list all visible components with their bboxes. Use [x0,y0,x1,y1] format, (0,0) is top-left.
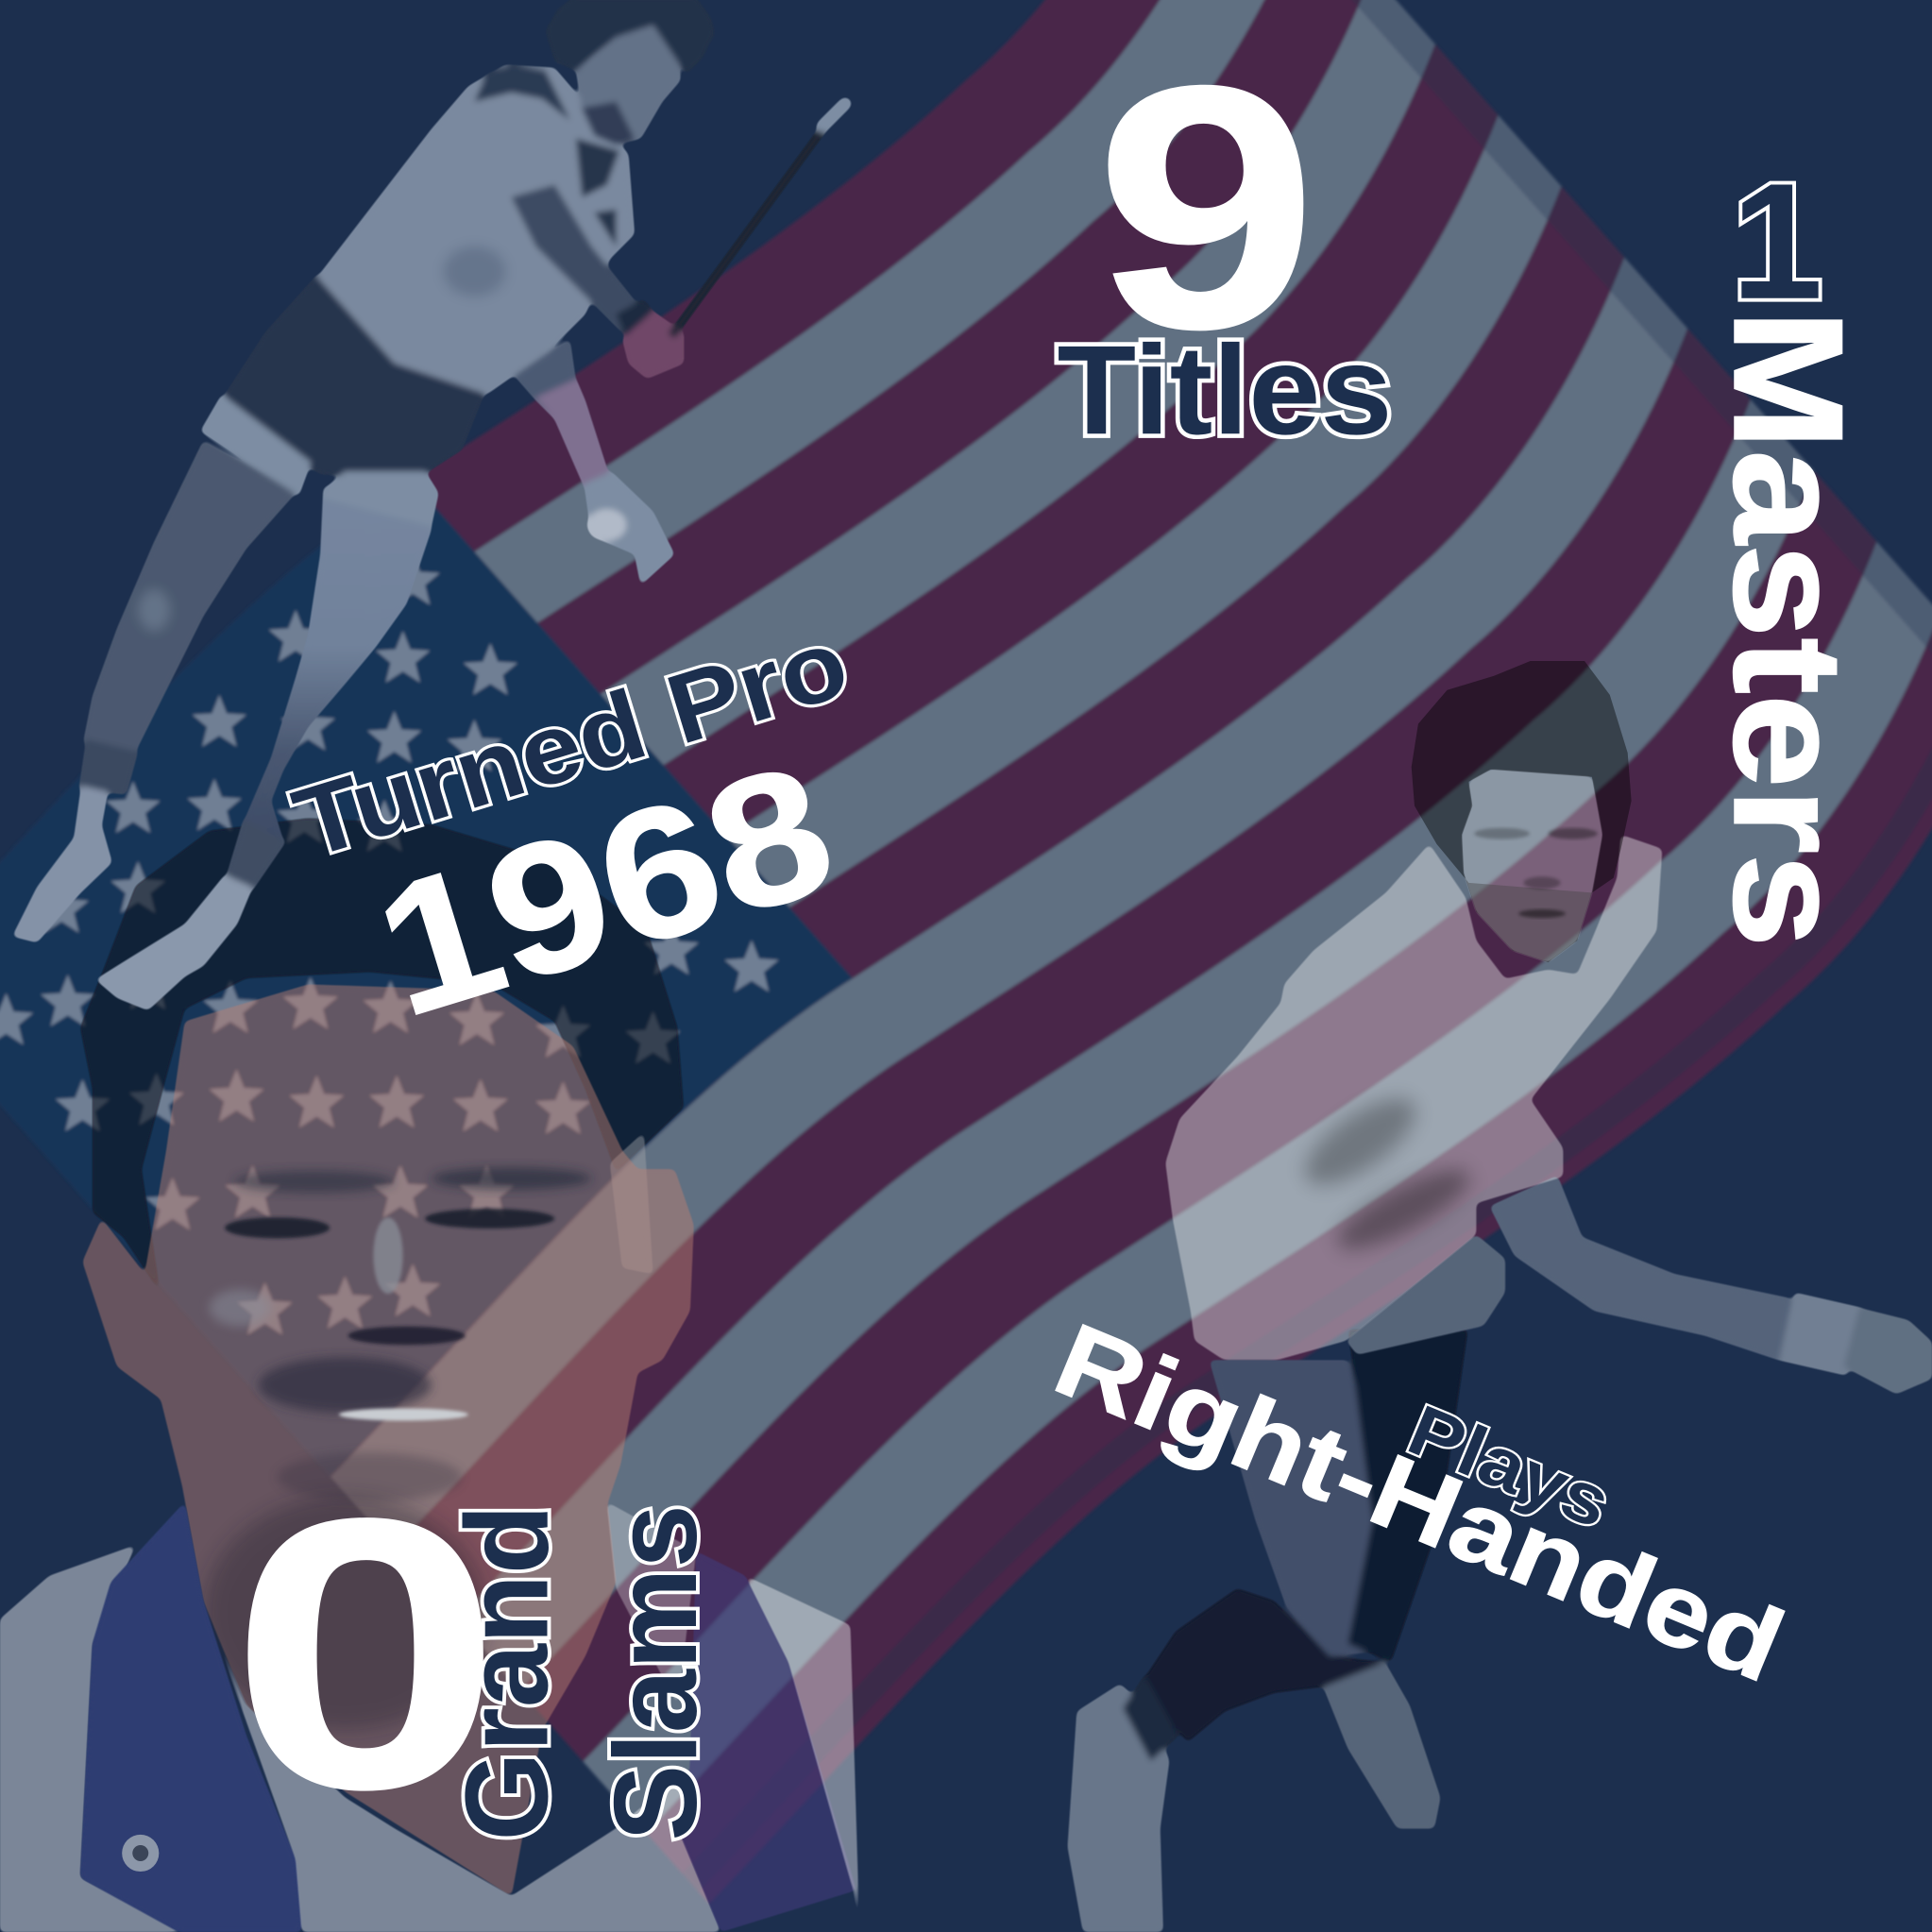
front sock [227,820,286,890]
lower arm [515,339,576,419]
beard shadow [583,102,635,144]
face [576,25,681,144]
stat: 0: 0 [229,1439,502,1869]
stat: Masters: Masters [1702,310,1875,947]
hair [80,818,684,1293]
greying hair over stripe [610,1132,653,1274]
forearm [512,185,641,332]
stat: Turned Pro: Turned Pro [282,608,860,879]
front shoe [95,874,252,1010]
stat: Right-Handed: Right-Handed [1040,1302,1799,1704]
back leg highlight [138,589,170,631]
shorts hems [200,395,311,496]
facial shadows [1474,828,1598,918]
jacket snap [122,1835,159,1872]
wristband [616,298,653,336]
facial features [210,1167,591,1502]
shorts [225,274,486,478]
photo: player running, right [1068,661,1932,1932]
shirt folds [1293,1083,1428,1200]
stat: 1968: 1968 [356,725,854,1056]
hair [1412,661,1632,962]
left jacket front [80,1502,302,1932]
neck shadow [203,1496,486,1730]
arm, wristband and hand [1490,1176,1932,1394]
stat: 1: 1 [1731,150,1823,334]
shirt [1165,835,1662,1360]
flag canton [0,481,853,1478]
racket [671,117,832,336]
right jacket front [678,1551,856,1932]
shirt [317,65,635,395]
right shoulder [745,1576,859,1932]
back leg [83,440,296,752]
canton stars [0,553,779,1334]
skin [82,985,694,1896]
chest shadows [576,139,619,197]
stat: Slams: Slams [591,1504,721,1840]
front leg [244,486,432,841]
racket hand [622,311,684,379]
shirt shadow [444,246,505,296]
stat: Grand: Grand [442,1504,572,1840]
face [1462,770,1602,962]
running legs [1068,1330,1468,1932]
shirt collar [203,1601,720,1932]
photo: player serving, top left [12,0,845,1010]
shorts [1347,1234,1505,1355]
left shoulder [0,1545,185,1932]
hair [545,0,715,74]
ball [587,509,627,541]
photo: smiling portrait, bottom left [0,818,859,1932]
right collar [607,1502,696,1705]
stat: Titles: Titles [1058,319,1392,461]
hand [584,471,674,585]
back shoe [12,786,112,942]
stat: 9: 9 [1095,15,1317,400]
back sock [79,739,138,795]
stat: Plays: Plays [1398,1390,1621,1544]
shoulder [474,65,569,120]
